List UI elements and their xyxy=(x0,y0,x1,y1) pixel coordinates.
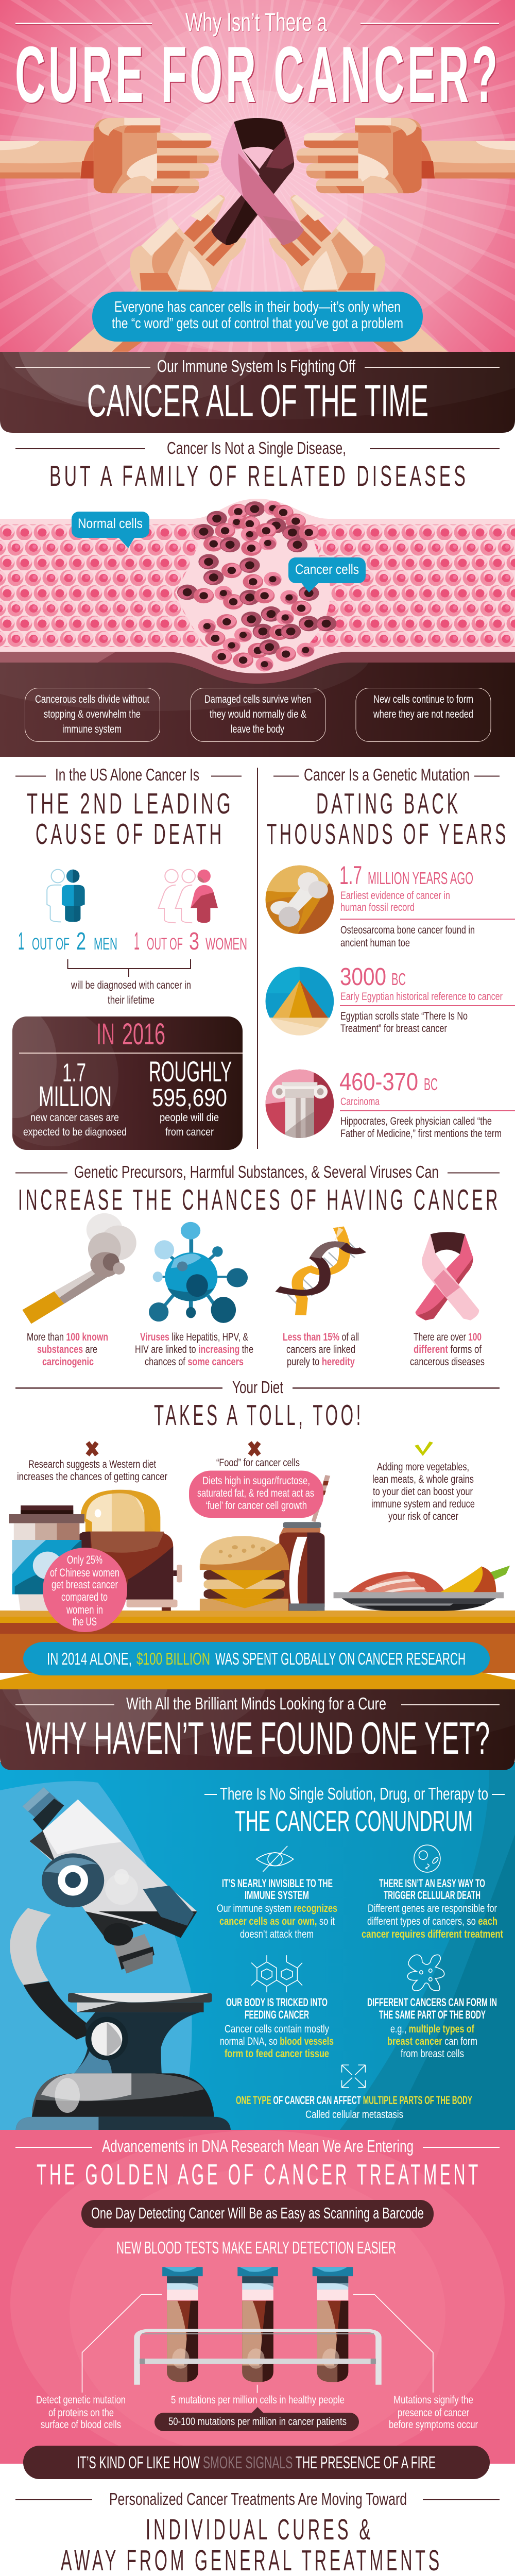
heading: family of related diseases xyxy=(15,438,500,493)
fact box 2: leave the body xyxy=(231,723,284,735)
panel: in 2016: 2016 xyxy=(122,1018,165,1051)
panel: in 2016 xyxy=(12,1016,243,1150)
callout lines xyxy=(82,2295,433,2393)
text: 1.7 million years ago: ancient human toe xyxy=(340,937,410,949)
callout: chinese women xyxy=(43,1548,127,1632)
text: heredity: cancers are linked xyxy=(286,1344,355,1355)
text: detect mutation: of proteins on the xyxy=(48,2407,114,2419)
icon: crossed eye xyxy=(256,1846,294,1872)
callout: chinese women: women in xyxy=(66,1603,103,1616)
point: metastasis: Called cellular metastasis xyxy=(305,2109,403,2121)
text: heredity: purely to heredity xyxy=(287,1356,355,1368)
stat: 595,690: 595,690 xyxy=(152,1084,227,1112)
bubble: normal cells: Normal cells xyxy=(78,516,143,531)
stat: 1.7 million: MILLION xyxy=(39,1080,112,1112)
icon: cancer cell blob xyxy=(407,1955,444,1991)
icon: virus xyxy=(149,1222,248,1323)
text: forms: There are over 100 xyxy=(414,1331,482,1343)
heading: In the US Alone Cancer Is xyxy=(55,765,199,784)
heading: THE 2ND LEADING xyxy=(27,787,234,820)
text: mutations comparison xyxy=(154,2394,359,2431)
stat: 1.7 million: new cancer cases are xyxy=(30,1112,119,1124)
bracket and caption xyxy=(68,959,191,1006)
bubble: normal cells xyxy=(72,512,149,548)
text: substances xyxy=(27,1331,108,1368)
column: healthy diet: your risk of cancer xyxy=(388,1511,458,1522)
text: viruses: chances of some cancers xyxy=(145,1356,244,1368)
stat: 1 out of 2 men: MEN xyxy=(94,935,117,953)
heading xyxy=(15,357,500,426)
column: food for cancer cells: “Food” for cancer cells xyxy=(216,1457,300,1469)
stat: 595,690: ROUGHLY xyxy=(149,1055,232,1088)
column: healthy diet: immune system and reduce xyxy=(371,1498,475,1510)
text: 3000 bc: BC xyxy=(391,970,406,989)
column: western diet xyxy=(9,1443,182,1632)
icon: greek column xyxy=(263,1068,335,1140)
callout: chinese women: of Chinese women xyxy=(50,1566,119,1579)
text: detect mutation xyxy=(36,2394,126,2431)
illustration: microscope xyxy=(16,1787,231,2130)
panel: dating back thousands of years xyxy=(266,768,515,1139)
panel: cancer conundrum xyxy=(0,1762,515,2130)
icon: bone xyxy=(266,866,334,934)
point: same part of the body: from breast cells xyxy=(401,2048,464,2060)
hero background with rays xyxy=(0,0,515,386)
illustration: plate of meat and vegetables xyxy=(334,1566,510,1611)
text: viruses xyxy=(135,1331,253,1368)
heading: Our Immune System Is Fighting Off xyxy=(157,357,356,376)
icon: arrows xyxy=(342,2065,365,2088)
hero panel xyxy=(0,0,515,386)
fact box 1: stopping & overwhelm the xyxy=(44,708,141,720)
text: 3000 bc: Egyptian scrolls state “There Is No xyxy=(340,1010,468,1022)
heading: With All the Brilliant Minds Looking for a Cure xyxy=(126,1694,386,1713)
callout: everyone has cancer cells: the “c word” gets out of control that you’ve got a problem xyxy=(112,315,403,332)
text: 460-370 bc: BC xyxy=(424,1075,438,1094)
point: metastasis xyxy=(236,2065,472,2121)
heading: why isn't there a: Why Isn’t There a xyxy=(185,8,327,37)
table band xyxy=(0,1611,515,1689)
heading: your diet xyxy=(15,1378,500,1432)
illustration: test tubes in rack xyxy=(137,2267,379,2385)
point: nearly invisible: IMMUNE SYSTEM xyxy=(245,1889,309,1902)
callout: diets high in sugar: ‘fuel’ for cancer cell growth xyxy=(205,1500,307,1512)
stat: 595,690 xyxy=(149,1055,232,1138)
panel: in 2016: IN xyxy=(96,1018,115,1051)
callout: diets high in sugar xyxy=(189,1470,323,1518)
text: mutations signify: Mutations signify the xyxy=(393,2394,473,2406)
stat: 1 out of 3 women: WOMEN xyxy=(205,935,247,953)
heading xyxy=(204,1784,505,1838)
stat: 1 out of 2 men: 2 xyxy=(76,928,86,955)
heading: individual cures xyxy=(15,2489,500,2576)
text: forms xyxy=(410,1331,485,1368)
text: 3000 bc: Treatment” for breast cancer xyxy=(340,1023,447,1035)
illustration: coffee cup and toaster xyxy=(9,1490,182,1611)
icon: x mark xyxy=(88,1443,97,1455)
column: healthy diet: Adding more vegetables, xyxy=(377,1461,469,1473)
bracket and caption: their lifetime xyxy=(108,994,154,1006)
fact box 1: immune system xyxy=(62,723,122,735)
stat: 1 out of 3 women: OUT OF xyxy=(147,935,183,953)
panel: immune system xyxy=(0,352,515,433)
stat: 1 out of 3 women xyxy=(134,928,247,955)
text: 460-370 bc: Carcinoma xyxy=(340,1096,380,1108)
point: tricked into feeding: Cancer cells contain mostly xyxy=(225,2023,329,2035)
stat: 595,690: from cancer xyxy=(165,1126,214,1138)
panel: why haven't we found one yet xyxy=(0,1689,515,1770)
icon: check mark xyxy=(415,1442,433,1456)
callout: chinese women: compared to xyxy=(61,1590,108,1603)
bubble: cancer cells xyxy=(288,557,366,592)
text: mutations signify: before symptoms occur xyxy=(389,2419,478,2431)
banner: smoke signals xyxy=(23,2446,490,2479)
text: mutations comparison: 50-100 mutations per million in cancer patients xyxy=(168,2416,347,2428)
heading: your diet: Your Diet xyxy=(232,1378,283,1397)
panel: golden age of treatment xyxy=(0,2130,515,2476)
point: nearly invisible xyxy=(217,1846,337,1940)
stat: 1 out of 2 men xyxy=(18,928,117,955)
pill: scanning a barcode xyxy=(81,2200,434,2228)
callout: chinese women: Only 25% xyxy=(67,1553,102,1566)
icon: dna xyxy=(278,1227,363,1315)
text: mutations comparison: 5 mutations per million cells in healthy people xyxy=(171,2394,345,2406)
point: nearly invisible: Our immune system recognizes xyxy=(217,1903,337,1914)
point: cellular death xyxy=(362,1845,503,1940)
stat: 1.7 million: 1.7 xyxy=(62,1058,86,1087)
text: forms: different forms of xyxy=(414,1344,482,1355)
fact box 3: New cells continue to form xyxy=(373,693,473,705)
column: healthy diet: lean meats, & whole grains xyxy=(372,1473,474,1485)
heading: why isn't there a xyxy=(15,8,499,37)
heading: family of related diseases: Cancer Is Not a Single Disease, xyxy=(167,438,346,457)
column: western diet: increases the chances of getting cancer xyxy=(17,1471,167,1483)
point: tricked into feeding: OUR BODY IS TRICKED INTO xyxy=(226,1996,328,2009)
callout: everyone has cancer cells: Everyone has cancer cells in their body—it’s only when xyxy=(114,299,401,315)
point: tricked into feeding: form to feed cancer tissue xyxy=(225,2048,329,2060)
heading: increase the chances xyxy=(15,1162,501,1216)
icon: men xyxy=(47,870,85,922)
text: substances: substances are xyxy=(37,1344,97,1355)
heading: CAUSE OF DEATH xyxy=(36,818,225,851)
text: 3000 bc xyxy=(340,963,515,1035)
text: mutations signify xyxy=(389,2394,478,2431)
text: substances: More than 100 known xyxy=(27,1331,108,1343)
column: healthy diet xyxy=(334,1442,510,1611)
fact box 3 xyxy=(356,688,491,742)
column: western diet: Research suggests a Western diet xyxy=(28,1459,156,1470)
stat: 1 out of 2 men: OUT OF xyxy=(32,935,70,953)
point: same part of the body: e.g., multiple types of xyxy=(390,2023,475,2035)
text: 460-370 bc: 460-370 xyxy=(339,1069,418,1096)
icon: x mark xyxy=(250,1443,259,1455)
heading xyxy=(15,2137,500,2191)
callout: chinese women: get breast cancer xyxy=(52,1578,118,1591)
banner: smoke signals: IT’S KIND OF LIKE HOW SMOKE SIGNALS THE PRESENCE OF A FIRE xyxy=(77,2453,436,2472)
text: 3000 bc: 3000 xyxy=(340,963,386,991)
text: detect mutation: surface of blood cells xyxy=(41,2419,121,2431)
point: same part of the body: breast cancer can form xyxy=(387,2036,477,2047)
banner: research spending: IN 2014 ALONE, xyxy=(47,1649,132,1668)
callout: diets high in sugar: Diets high in sugar/fructose, xyxy=(202,1475,310,1487)
text: 1.7 million years ago: human fossil record xyxy=(340,902,415,913)
text: 1.7 million years ago: 1.7 xyxy=(339,861,362,890)
icon: pyramid xyxy=(263,965,335,1037)
illustration: hands and ribbon xyxy=(0,118,515,352)
text: heredity xyxy=(283,1331,359,1368)
icon: women xyxy=(159,870,218,923)
point: tricked into feeding xyxy=(220,1955,334,2060)
banner: research spending: $100 BILLION xyxy=(136,1649,210,1668)
point: nearly invisible: IT’S NEARLY INVISIBLE TO THE xyxy=(222,1877,333,1890)
fact box 2: they would normally die & xyxy=(210,708,306,720)
text: 1.7 million years ago xyxy=(339,861,515,949)
stat: 1 out of 3 women: 3 xyxy=(189,928,199,955)
point: tricked into feeding: FEEDING CANCER xyxy=(245,2008,309,2021)
icon: pink ribbon xyxy=(416,1232,479,1320)
point: cellular death: different types of cancers, so each xyxy=(367,1916,497,1927)
text: forms: cancerous diseases xyxy=(410,1356,485,1368)
callout: everyone has cancer cells xyxy=(92,292,423,342)
illustration: burger and soda xyxy=(200,1475,330,1611)
heading: individual cures: Personalized Cancer Treatments Are Moving Toward xyxy=(109,2489,407,2509)
stat: 1 out of 2 men: 1 xyxy=(18,928,24,955)
cancer cells cluster xyxy=(177,501,336,671)
text: 460-370 bc xyxy=(339,1069,515,1140)
fact box 1 xyxy=(25,688,160,742)
text: viruses: Viruses like Hepatitis, HPV, & xyxy=(140,1331,248,1343)
fact box 3: where they are not needed xyxy=(373,708,473,720)
bracket and caption: will be diagnosed with cancer in xyxy=(71,979,191,991)
panel: 2nd leading cause of death xyxy=(0,765,247,1150)
text: heredity: Less than 15% of all xyxy=(283,1331,359,1343)
stat: 1 out of 3 women: 1 xyxy=(134,928,140,955)
icon: molecule xyxy=(251,1955,302,1992)
point: tricked into feeding: normal DNA, so blood vessels xyxy=(220,2036,334,2047)
text: mutations signify: presence of cancer xyxy=(398,2407,469,2419)
heading xyxy=(15,765,242,851)
text: substances: carcinogenic xyxy=(42,1356,94,1368)
fact box 2: Damaged cells survive when xyxy=(204,693,311,705)
point: nearly invisible: cancer cells as our own, so it xyxy=(219,1916,335,1927)
point: nearly invisible: doesn’t attack them xyxy=(240,1928,314,1940)
icon: cell xyxy=(414,1845,440,1872)
callout: diets high in sugar: saturated fat, & red meat act as xyxy=(197,1487,314,1499)
fact box 1: Cancerous cells divide without xyxy=(35,693,149,705)
stat: 595,690: people will die xyxy=(160,1112,219,1124)
icon: cigarette xyxy=(22,1213,136,1324)
text: 1.7 million years ago: Earliest evidence of cancer in xyxy=(340,890,450,902)
fact box 2 xyxy=(191,688,325,742)
column: food for cancer cells xyxy=(189,1443,330,1611)
text: detect mutation: Detect genetic mutation xyxy=(36,2394,126,2406)
banner: research spending xyxy=(23,1642,490,1675)
heading xyxy=(267,765,509,851)
heading: Advancements in DNA Research Mean We Are Entering xyxy=(102,2137,414,2156)
panel: cell tissue diagram xyxy=(0,499,515,757)
text: 1.7 million years ago: Osteosarcoma bone cancer found in xyxy=(340,924,475,936)
column: healthy diet: to your diet can boost your xyxy=(373,1486,473,1498)
callout: chinese women: the US xyxy=(73,1615,97,1628)
text: viruses: HIV are linked to increasing the xyxy=(135,1344,253,1355)
stat: 1.7 million: expected to be diagnosed xyxy=(23,1126,127,1138)
bubble: cancer cells: Cancer cells xyxy=(295,562,359,577)
stat: 1.7 million xyxy=(23,1058,127,1138)
point: same part of the body xyxy=(367,1955,497,2060)
